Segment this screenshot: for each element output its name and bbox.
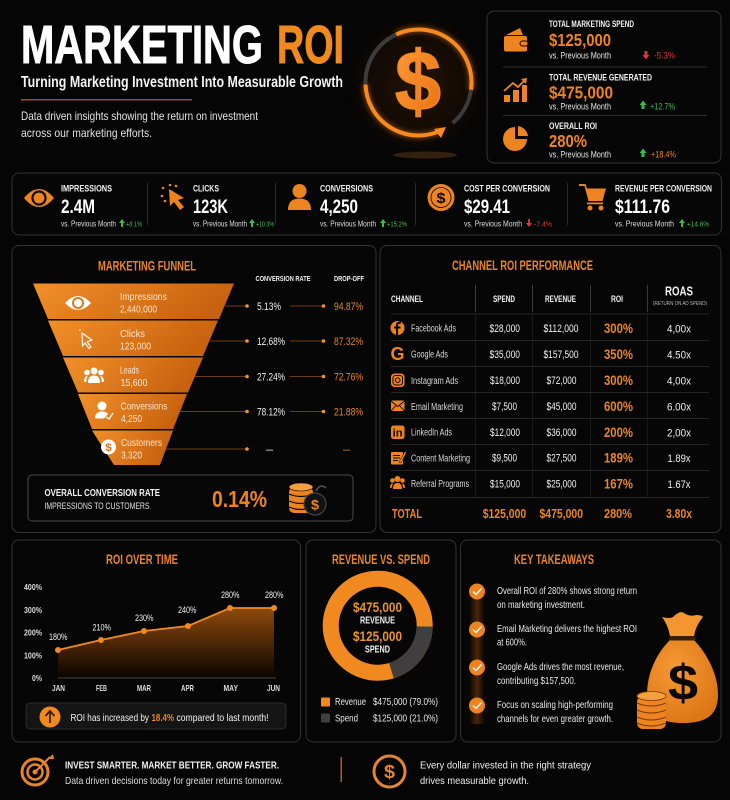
panel: key takeaways [460, 540, 721, 742]
kpi: impressions: +8.1% [126, 220, 142, 228]
donut chart: $475,000 [353, 599, 402, 615]
heading: MARKETING FUNNEL [98, 258, 196, 274]
row: linkedin ads: LinkedIn Ads [411, 428, 452, 438]
takeaway 1 [469, 584, 637, 611]
metric: total marketing spend: vs. Previous Month [549, 50, 611, 60]
funnel: conversions: Conversions [120, 400, 168, 412]
panel: roi over time [12, 540, 300, 742]
row: referral programs: 1.67x [668, 479, 691, 491]
takeaway 4: channels for even greater growth. [497, 713, 613, 725]
y axis labels [24, 582, 42, 683]
donut chart [331, 579, 425, 673]
callout: roi increase [26, 703, 286, 729]
kpi: revenue per conversion: $111.76 [615, 196, 670, 218]
row: email marketing: $45,000 [546, 401, 576, 413]
icon: dollar coin [428, 184, 454, 211]
data labels: 210% [92, 622, 111, 634]
takeaway 3: Google Ads drives the most revenue, [497, 661, 624, 673]
footer [22, 754, 592, 787]
takeaway 4 [469, 698, 613, 725]
row: referral programs: $15,000 [490, 478, 520, 490]
row: content marketing: 1.89x [668, 453, 691, 465]
funnel rates [257, 301, 363, 456]
row: instagram ads: $18,000 [490, 375, 520, 387]
row: facebook ads: 300% [604, 320, 633, 336]
funnel rates: 27.24% [257, 372, 285, 384]
description: Data driven insights showing the return on investment [21, 109, 259, 123]
heading: KEY TAKEAWAYS [514, 551, 594, 567]
funnel rates: — [343, 444, 350, 456]
row: linkedin ads: 2,00x [667, 428, 691, 440]
row: total: $125,000 [483, 507, 526, 521]
kpi: clicks: 123K [193, 196, 228, 218]
x axis labels: MAR [137, 683, 151, 693]
row: facebook ads [390, 320, 691, 336]
metric: overall roi: vs. Previous Month [549, 150, 611, 160]
column headers: DROP-OFF [334, 274, 364, 283]
row: google ads: $35,000 [490, 349, 520, 361]
funnel rates: 87.32% [334, 336, 363, 348]
y axis labels: 100% [24, 650, 42, 660]
kpi: clicks [193, 184, 274, 228]
data labels: 280% [265, 590, 284, 601]
icon: money bag and coins: $ [668, 655, 698, 711]
funnel: leads: 15,600 [120, 377, 148, 389]
funnel: impressions: 2,440,000 [120, 304, 157, 316]
metric: total marketing spend: $125,000 [549, 30, 611, 50]
icon: eye [24, 189, 54, 207]
line chart [24, 582, 284, 693]
row: linkedin ads: $12,000 [490, 427, 520, 439]
funnel rates: 21.88% [334, 406, 363, 418]
icon: dollar circle: $ [384, 762, 395, 782]
row: instagram ads: 300% [604, 372, 633, 388]
table header: ROI [611, 294, 623, 304]
x axis labels [52, 683, 280, 693]
icon: dollar coin: $ [436, 190, 446, 207]
panel: kpi strip [12, 173, 722, 235]
kpi: cost per conversion: vs. Previous Month [464, 220, 522, 228]
header: title block: across our marketing efforts. [21, 126, 152, 140]
funnel rates: 78.12% [257, 406, 285, 418]
x axis labels: FEB [96, 683, 107, 693]
row: total: 3.80x [666, 507, 692, 521]
row: facebook ads: Facebook Ads [411, 324, 456, 334]
funnel rates: 94.87% [334, 301, 363, 313]
row: facebook ads: $112,000 [544, 323, 578, 335]
row: total: 280% [604, 507, 632, 521]
row: content marketing: Content Marketing [411, 454, 470, 464]
takeaway 3 [469, 660, 624, 687]
metric: total revenue generated: vs. Previous Month [549, 102, 611, 112]
takeaway 2: Email Marketing delivers the highest ROI [497, 623, 637, 635]
row: total [392, 507, 692, 521]
donut chart: SPEND [365, 644, 390, 656]
icon: person [288, 184, 311, 210]
callout: overall conversion rate: 0.14% [212, 486, 267, 512]
data labels: 280% [221, 590, 240, 601]
table header: (RETURN ON AD SPEND) [653, 301, 707, 307]
row: referral programs: Referral Programs [411, 479, 469, 490]
funnel: impressions [33, 284, 234, 319]
kpi: cost per conversion: $29.41 [464, 196, 510, 218]
title accent: ROI [277, 15, 344, 75]
panel: marketing funnel [12, 246, 376, 532]
row: instagram ads: Instagram Ads [411, 376, 458, 387]
table header [391, 284, 707, 307]
icon: coins and money bag [289, 483, 326, 515]
row: content marketing [391, 450, 691, 466]
row: referral programs: 167% [604, 476, 633, 492]
kpi: clicks: vs. Previous Month [193, 220, 247, 228]
panel: headline metrics [487, 11, 721, 163]
callout: overall conversion rate: IMPRESSIONS TO CUSTOMERS [44, 501, 150, 512]
funnel: customers: $ [105, 442, 112, 454]
table header: CHANNEL [391, 294, 423, 304]
funnel rates: — [266, 444, 273, 456]
y axis labels: 200% [24, 628, 42, 638]
callout: overall conversion rate [28, 475, 353, 521]
title: MARKETING [21, 15, 263, 75]
takeaway 1: on marketing investment. [497, 599, 585, 611]
slogan detail: Data driven decisions today for greater returns tomorrow. [65, 775, 283, 787]
funnel: leads: Leads [120, 364, 139, 376]
funnel: leads [63, 358, 203, 392]
data labels [49, 590, 284, 643]
icon: dollar circle [374, 756, 405, 787]
metric: total marketing spend: -5.3% [654, 50, 675, 62]
x axis labels: MAY [224, 683, 238, 693]
table header: SPEND [493, 294, 515, 304]
callout: roi increase: ROI has increased by [70, 712, 150, 724]
funnel: clicks: Clicks [120, 328, 145, 340]
column headers: CONVERSION RATE [256, 274, 310, 283]
row: google ads [390, 344, 691, 364]
icon: glowing dollar ring: $ [395, 34, 441, 128]
metric: overall roi [549, 121, 676, 160]
row: instagram ads: 4,00x [667, 376, 691, 388]
metric: total revenue generated: TOTAL REVENUE GENERATED [549, 72, 652, 84]
heading: CHANNEL ROI PERFORMANCE [452, 257, 593, 273]
kpi: impressions: 2.4M [61, 196, 95, 218]
slogan: INVEST SMARTER. MARKET BETTER. GROW FASTER. [65, 760, 279, 772]
row: google ads: G [390, 344, 404, 364]
funnel: customers: Customers [121, 437, 162, 449]
row: linkedin ads: 200% [604, 424, 633, 440]
callout: roi increase: compared to last month! [176, 712, 268, 724]
funnel: customers [92, 430, 173, 465]
row: email marketing: Email Marketing [411, 402, 463, 413]
metric: overall roi: 280% [549, 131, 587, 151]
funnel rates: 72.76% [334, 372, 363, 384]
row: referral programs [390, 476, 691, 492]
panel: channel roi performance [380, 246, 721, 532]
row: linkedin ads [391, 424, 691, 440]
table header: ROAS [665, 284, 693, 298]
kpi: conversions: 4,250 [320, 196, 358, 218]
y axis labels: 400% [24, 582, 42, 592]
funnel: conversions: 4,250 [121, 413, 142, 425]
icon: pie chart [503, 126, 528, 151]
takeaway 2: at 600%. [497, 636, 527, 648]
y axis labels: 300% [24, 605, 42, 615]
row: linkedin ads: $36,000 [546, 427, 576, 439]
x axis labels: APR [181, 683, 194, 693]
kpi: clicks: +10.3% [256, 220, 274, 228]
metric: total revenue generated: +12.7% [650, 102, 675, 112]
metric: total revenue generated [549, 72, 675, 112]
kpi: cost per conversion: COST PER CONVERSION [464, 184, 550, 194]
row: instagram ads [391, 372, 691, 388]
x axis labels: JUN [267, 683, 280, 693]
row: total: $475,000 [540, 507, 583, 521]
row: email marketing: $7,500 [492, 401, 517, 413]
funnel rates: 12.68% [257, 336, 285, 348]
row: instagram ads: $72,000 [546, 375, 576, 387]
kpi: clicks: CLICKS [193, 184, 219, 194]
metric: total marketing spend: TOTAL MARKETING SPEND [549, 19, 634, 30]
kpi: cost per conversion [464, 184, 552, 228]
data labels: 230% [135, 613, 154, 624]
legend: Spend [335, 712, 358, 724]
column headers [256, 274, 364, 283]
takeaway 2 [469, 622, 637, 648]
icon: shopping cart [579, 184, 606, 210]
funnel: clicks [48, 320, 218, 356]
kpi: conversions: +15.2% [387, 220, 407, 228]
closing statement: Every dollar invested in the right strategy [420, 760, 592, 772]
funnel: conversions [78, 394, 187, 429]
footer: drives measurable growth. [420, 775, 529, 787]
metric: overall roi: +18.4% [651, 150, 676, 160]
x axis labels: JAN [52, 683, 65, 693]
takeaway 4: Focus on scaling high-performing [497, 699, 613, 711]
icon: glowing dollar ring [340, 7, 496, 163]
icon: growth chart [504, 78, 527, 102]
subtitle: Turning Marketing Investment Into Measurable Growth [21, 74, 343, 91]
icon: cursor click [161, 184, 184, 210]
row: content marketing: $9,500 [492, 452, 517, 464]
row: google ads: Google Ads [411, 350, 448, 360]
legend: $475,000 (79.0%) [373, 696, 438, 708]
takeaway 1: Overall ROI of 280% shows strong return [497, 585, 637, 597]
icon: wallet [504, 28, 528, 52]
kpi: cost per conversion: -7.4% [534, 220, 552, 228]
kpi: impressions [61, 184, 142, 228]
y axis labels: 0% [32, 673, 42, 683]
icon: money bag and coins [637, 612, 718, 729]
kpi: revenue per conversion: vs. Previous Month [615, 220, 674, 228]
takeaway 3: contributing $157,500. [497, 675, 576, 687]
metric: overall roi: OVERALL ROI [549, 121, 597, 132]
table header: REVENUE [545, 294, 576, 304]
kpi: revenue per conversion: +14.6% [687, 220, 709, 228]
metric: total revenue generated: $475,000 [549, 82, 613, 102]
data labels: 240% [178, 605, 197, 616]
panel: revenue vs spend [306, 540, 456, 742]
row: content marketing: $27,500 [546, 452, 576, 464]
row: linkedin ads: in [393, 428, 403, 440]
icon: coins and money bag: $ [311, 496, 319, 512]
row: facebook ads: $28,000 [490, 323, 520, 335]
row: content marketing: 189% [604, 450, 633, 466]
metric: total marketing spend [549, 19, 675, 62]
row: google ads: 350% [604, 346, 633, 362]
funnel: impressions: Impressions [120, 291, 167, 303]
legend: Revenue [335, 696, 366, 708]
row: total: TOTAL [392, 507, 422, 521]
row: email marketing: 6.00x [667, 402, 691, 414]
row: email marketing [391, 398, 691, 414]
kpi: conversions: CONVERSIONS [320, 184, 373, 194]
funnel: customers: 3,320 [121, 450, 142, 462]
kpi: impressions: vs. Previous Month [61, 220, 116, 228]
kpi: impressions: IMPRESSIONS [61, 184, 112, 194]
kpi: conversions [320, 184, 407, 228]
row: google ads: 4.50x [667, 350, 691, 362]
legend [321, 696, 438, 724]
callout: overall conversion rate: OVERALL CONVERSION RATE [44, 488, 160, 499]
row: facebook ads: 4,00x [667, 324, 691, 336]
donut chart: REVENUE [360, 616, 395, 626]
data labels: 180% [49, 632, 68, 643]
donut chart: $125,000 [353, 628, 402, 644]
row: google ads: $157,500 [544, 349, 578, 361]
row: referral programs: $25,000 [546, 478, 576, 490]
funnel rates: 5.13% [257, 301, 281, 313]
kpi: conversions: vs. Previous Month [320, 220, 376, 228]
heading: ROI OVER TIME [106, 551, 178, 567]
icon: target [22, 754, 54, 785]
row: email marketing: 600% [604, 398, 633, 414]
heading: REVENUE VS. SPEND [332, 551, 430, 567]
header: title block [21, 15, 344, 140]
callout: roi increase: 18.4% [152, 712, 174, 724]
leader lines [166, 304, 325, 451]
legend: $125,000 (21.0%) [373, 712, 438, 724]
kpi: revenue per conversion [615, 184, 712, 228]
funnel: clicks: 123,000 [120, 340, 151, 352]
